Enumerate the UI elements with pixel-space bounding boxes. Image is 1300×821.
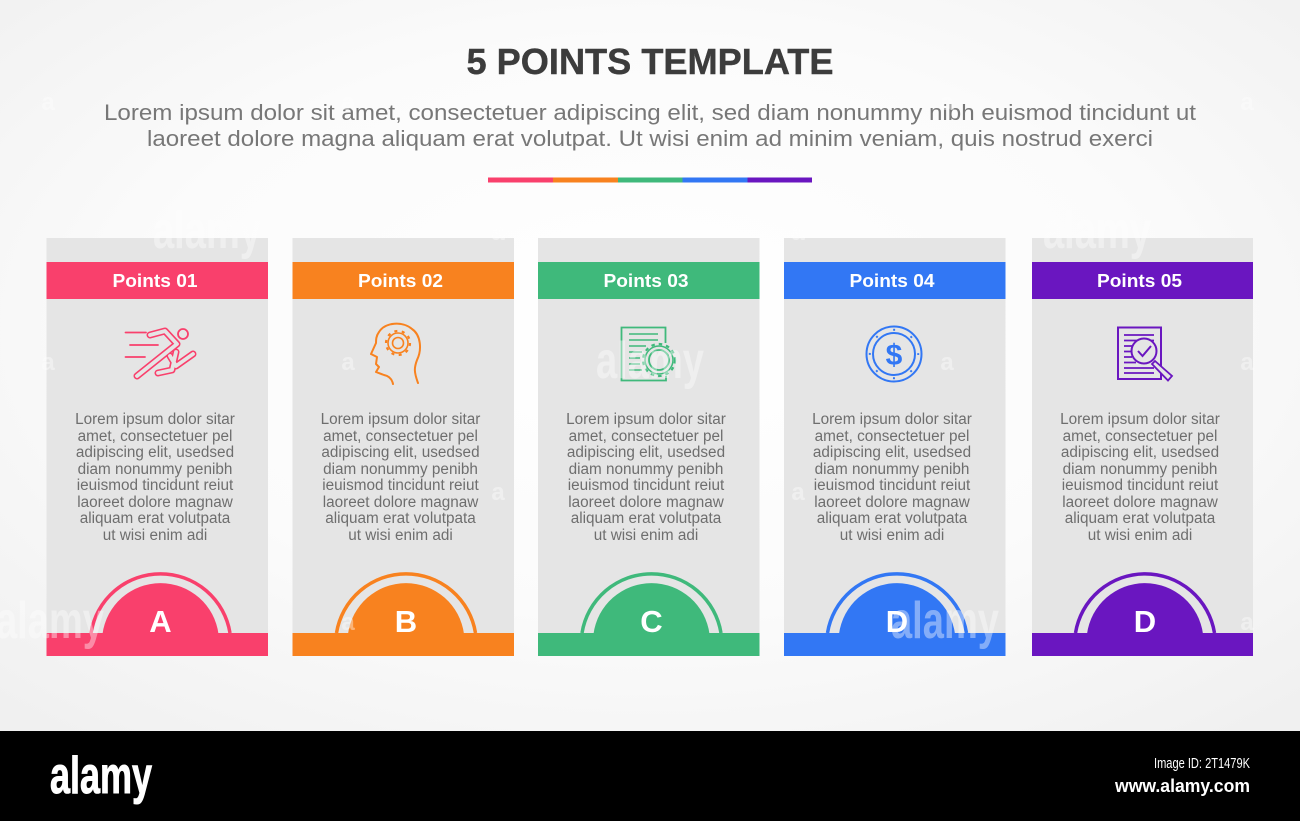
body text: laoreet dolore magnaw [1062,494,1219,511]
body text: diam nonummy penibh [1063,461,1217,478]
watermarks: a [341,349,355,376]
body text: aliquam erat volutpata [325,510,476,527]
body text: Lorem ipsum dolor sitar [566,411,726,428]
body text: ut wisi enim adi [103,527,207,544]
watermarks: a [41,349,55,376]
subtitle text: Lorem ipsum dolor sit amet, consectetuer adipiscing elit, sed diam nonummy nibh euismod tincidunt ut [104,100,1196,125]
body text: amet, consectetuer pel [323,428,478,445]
image id: Image ID: 2T1479K [1154,755,1250,772]
body text: ieuismod tincidunt reiut [322,477,479,494]
body text: ieuismod tincidunt reiut [814,477,971,494]
body text: aliquam erat volutpata [571,510,722,527]
body text: laoreet dolore magnaw [77,494,234,511]
watermarks: alamy [1043,202,1151,260]
badge B [292,574,514,656]
body text: amet, consectetuer pel [1063,428,1217,445]
body text: Lorem ipsum dolor sitar [812,411,972,428]
watermarks: a [341,89,355,116]
badge B: B [395,604,417,639]
body text [75,411,235,544]
subtitle text [104,100,1196,151]
body text: adipiscing elit, usedsed [1061,444,1219,461]
watermarks: alamy [596,332,704,390]
watermarks [0,89,1254,650]
panel: points 03 [538,238,760,656]
badge A [46,574,268,656]
body text: ut wisi enim adi [1088,527,1192,544]
watermarks: alamy [0,592,104,650]
watermarks: a [940,349,954,376]
watermarks: a [940,89,954,116]
body text: laoreet dolore magnaw [814,494,971,511]
heading: points 05: Points 05 [1097,270,1182,291]
badge A: A [149,604,172,639]
body text: ut wisi enim adi [348,527,453,544]
watermarks: a [491,479,505,506]
badge C [538,574,760,656]
body text: diam nonummy penibh [78,461,232,478]
body text: adipiscing elit, usedsed [321,444,480,461]
heading: points 01: Points 01 [112,270,198,291]
body text [1060,411,1220,544]
badge C: C [640,604,663,639]
body text: Lorem ipsum dolor sitar [321,411,480,428]
subtitle text: laoreet dolore magna aliquam erat volutpat. Ut wisi enim ad minim veniam, quis nostrud exerci [147,126,1153,151]
watermarks: a [791,479,805,506]
body text [321,411,480,544]
website: www.alamy.com [1114,776,1250,796]
body text: Lorem ipsum dolor sitar [1060,411,1220,428]
body text: ieuismod tincidunt reiut [77,477,234,494]
body text: ieuismod tincidunt reiut [1062,477,1219,494]
body text: ut wisi enim adi [594,527,698,544]
badge D [784,574,1006,656]
watermarks: a [1240,609,1254,636]
heading: points 02: Points 02 [358,270,443,291]
body text: laoreet dolore magnaw [323,494,479,511]
panel: points 05 [1032,238,1253,656]
watermarks: a [491,219,505,246]
body text: amet, consectetuer pel [78,428,232,445]
icon: head with gear [371,324,420,384]
panel: points 02 [292,238,514,656]
body text: amet, consectetuer pel [569,428,723,445]
icon: running man [126,329,193,376]
badge D: D [886,604,908,639]
body text: ieuismod tincidunt reiut [568,477,725,494]
body text: Lorem ipsum dolor sitar [75,411,235,428]
rainbow divider [488,178,812,182]
badge D: D [1134,604,1156,639]
icon: document with gear [622,328,675,380]
body text [566,411,726,544]
watermarks: alamy [153,202,261,260]
footer bar [0,731,1300,821]
heading: points 03: Points 03 [604,270,688,291]
watermarks: a [791,219,805,246]
body text: diam nonummy penibh [323,461,478,478]
watermarks: a [1240,89,1254,116]
icon: dollar coin [866,326,922,382]
title: 5 POINTS TEMPLATE [466,41,834,82]
watermarks: alamy [891,592,999,650]
badge D [1032,574,1253,656]
body text: diam nonummy penibh [815,461,969,478]
body text [812,411,972,544]
body text: aliquam erat volutpata [80,510,231,527]
footer logo: alamy [50,747,152,805]
body text: amet, consectetuer pel [815,428,969,445]
heading: points 04: Points 04 [850,270,935,291]
body text: diam nonummy penibh [569,461,723,478]
body text: aliquam erat volutpata [1065,510,1216,527]
body text: ut wisi enim adi [840,527,944,544]
body text: adipiscing elit, usedsed [567,444,725,461]
body text: adipiscing elit, usedsed [76,444,234,461]
panel: points 01 [46,238,268,656]
watermarks: a [341,609,355,636]
watermarks: a [1240,349,1254,376]
body text: aliquam erat volutpata [817,510,968,527]
body text: laoreet dolore magnaw [568,494,725,511]
body text: adipiscing elit, usedsed [813,444,971,461]
icon: document magnifier [1118,328,1172,380]
icon: dollar coin: $ [886,339,903,372]
panel: points 04 [784,238,1006,656]
watermarks: a [41,89,55,116]
